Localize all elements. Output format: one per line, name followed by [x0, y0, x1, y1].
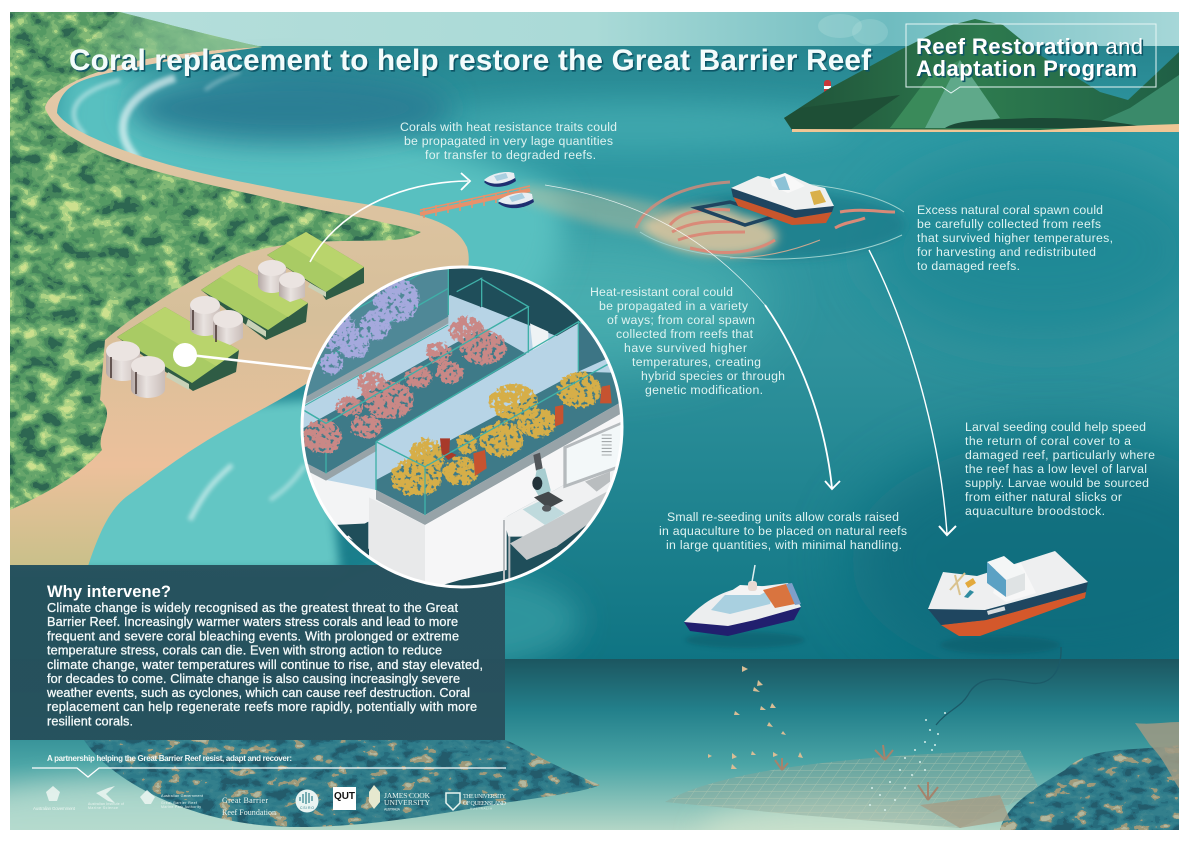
storage tanks [106, 260, 305, 398]
logo: James Cook University: AUSTRALIA [384, 808, 401, 812]
arrow: slick to re-seeding [545, 185, 840, 489]
why intervene panel: climate change, water temperatures will continue to rise, and stay elevated, [47, 658, 483, 672]
larval release hose and seed [869, 647, 1061, 811]
text: larval seeding [965, 420, 1155, 518]
logo: Australian Institute of Marine Science: Australian Institute of [88, 802, 124, 806]
re-seeding boat [684, 565, 805, 648]
why intervene panel [10, 565, 505, 740]
text: excess spawn: be carefully collected from reefs [917, 217, 1101, 231]
text: excess spawn: to damaged reefs. [917, 259, 1020, 273]
why intervene panel: weather events, such as cyclones, which can cause reef destruction. Coral [46, 686, 470, 700]
logo: Australian Government [33, 786, 76, 811]
text: propagation methods: collected from reefs that [616, 327, 754, 341]
text: excess spawn [917, 203, 1113, 273]
logo: James Cook University [369, 785, 431, 812]
connector from building to zoom circle [173, 343, 312, 369]
logo: James Cook University: JAMES COOK [384, 791, 431, 800]
text: re-seeding units: Small re-seeding units allow corals raised [667, 510, 899, 524]
arrow: facility to jetty [310, 173, 470, 262]
partner logos [33, 785, 507, 817]
logo: Great Barrier Reef Foundation [222, 796, 276, 817]
text: larval seeding: supply. Larvae would be sourced [965, 476, 1149, 490]
text: larval seeding: damaged reef, particularly where [965, 448, 1155, 462]
sky band [120, 12, 1179, 46]
tank row 1: purple corals [300, 267, 480, 420]
coral spawn slick [636, 182, 905, 259]
collection vessel [731, 173, 834, 225]
text: larval seeding: aquaculture broodstock. [965, 504, 1105, 518]
partnership line: A partnership helping the Great Barrier Reef resist, adapt and recover: [47, 754, 292, 763]
land: sandy beach [10, 12, 469, 566]
aquaculture facility [106, 232, 364, 398]
text: propagation methods: genetic modification. [645, 383, 763, 397]
why intervene panel: temperature stress, corals can die. Even with strong action to reduce [47, 644, 442, 658]
text: propagation methods: of ways; from coral spawn [607, 313, 755, 327]
text: larval seeding: the reef has a low level of larval [965, 462, 1147, 476]
text: re-seeding units: in aquaculture to be placed on natural reefs [659, 524, 907, 538]
logo: University of Queensland: THE UNIVERSITY [463, 794, 507, 800]
microscope [523, 453, 565, 525]
logo: Great Barrier Reef Marine Park Authority [140, 790, 204, 809]
reef seabed grid [665, 750, 1040, 828]
pink coral colonies [303, 316, 507, 454]
text: heat resistance traits: for transfer to degraded reefs. [425, 148, 596, 162]
program logo box [906, 24, 1156, 93]
building 3 [117, 307, 239, 391]
text: heat resistance traits [400, 120, 617, 162]
text: larval seeding: from either natural slicks or [965, 490, 1122, 504]
text: excess spawn: for harvesting and redistributed [917, 245, 1096, 259]
logo: Great Barrier Reef Foundation: Great Barrier [222, 796, 268, 805]
logo: Australian Institute of Marine Science [88, 786, 124, 810]
right reef [920, 722, 1180, 830]
text: propagation methods: have survived higher [624, 341, 747, 355]
logo: Great Barrier Reef Marine Park Authority: Great Barrier Reef [161, 801, 197, 805]
zoom circle: coral aquaculture lab [300, 260, 633, 590]
partnership line [32, 754, 506, 777]
text: propagation methods: be propagated in a variety [599, 299, 749, 313]
logo: Great Barrier Reef Foundation: Reef Foundation [222, 808, 276, 817]
text: excess spawn: that survived higher temperatures, [917, 231, 1113, 245]
small boat at jetty 1 [484, 172, 516, 187]
logo: Great Barrier Reef Marine Park Authority: Marine Park Authority [161, 805, 201, 809]
logo: CSIRO [296, 790, 318, 812]
lab desk [503, 417, 633, 580]
logo: James Cook University: UNIVERSITY [384, 798, 431, 807]
text: re-seeding units [659, 510, 907, 552]
logo: Australian Government: Australian Government [33, 806, 76, 811]
text: larval seeding: the return of coral cover to a [965, 434, 1131, 448]
purple coral colonies [320, 278, 419, 374]
logo: CSIRO: CSIRO [300, 806, 314, 810]
small seabed corals [775, 745, 938, 800]
why intervene panel: frequent and severe coral bleaching events. With prolonged or extreme [47, 630, 459, 644]
zoom circle outline [302, 267, 622, 587]
text: propagation methods: temperatures, creating [632, 355, 761, 369]
program logo box: Reef Restoration and [916, 34, 1143, 59]
why intervene panel: Barrier Reef. Increasingly warmer waters stress corals and lead to more [47, 615, 458, 629]
building 1 [267, 232, 364, 300]
logo: QUT [333, 787, 356, 810]
text: propagation methods [590, 285, 785, 397]
land: pale headland strip [72, 12, 262, 80]
land: island foliage [10, 12, 421, 510]
logo: Australian Institute of Marine Science: Marine Science [88, 806, 118, 810]
text: heat resistance traits: be propagated in very lage quantities [404, 134, 613, 148]
title: Coral replacement to help restore the Great Barrier Reef [69, 44, 871, 77]
program logo box: Adaptation Program [916, 56, 1137, 81]
text: re-seeding units: in large quantities, with minimal handling. [666, 538, 902, 552]
logo: University of Queensland: AUSTRALIA [470, 806, 492, 810]
why intervene panel: replacement can help regenerate reefs more rapidly, potentially with more [47, 700, 477, 714]
seed larvae [708, 666, 803, 769]
tank row 3: yellow corals [376, 300, 633, 525]
lab bench front [369, 497, 425, 590]
why intervene panel: Climate change is widely recognised as the greatest threat to the Great [47, 601, 458, 615]
logo: University of Queensland [446, 793, 507, 810]
text: propagation methods: hybrid species or through [641, 369, 785, 383]
building 2 [201, 265, 308, 340]
sea surface [10, 46, 1190, 680]
small boat at jetty 2 [498, 193, 534, 208]
why intervene panel: for decades to come. Climate change is also causing increasingly severe [47, 672, 460, 686]
jetty [420, 186, 530, 218]
text: larval seeding: Larval seeding could help speed [965, 420, 1146, 434]
why intervene panel: resilient corals. [47, 714, 133, 728]
text: excess spawn: Excess natural coral spawn could [917, 203, 1103, 217]
logo: Great Barrier Reef Marine Park Authority: Australian Government [161, 794, 204, 798]
white bench floors [300, 303, 633, 580]
underwater scene [0, 659, 1179, 842]
lighthouse buoy [824, 80, 831, 95]
tank row 2: pink corals [300, 278, 567, 490]
larval seeding vessel [928, 551, 1088, 654]
monitor [563, 417, 633, 488]
bay foam [74, 72, 305, 520]
why intervene panel: Why intervene? [47, 583, 171, 601]
island hill [784, 19, 1179, 132]
logo: QUT: QUT [334, 791, 355, 802]
left reef [84, 740, 600, 827]
logo: University of Queensland: OF QUEENSLAND [463, 801, 507, 807]
arrow: slick to larval vessel [869, 250, 956, 535]
text: propagation methods: Heat-resistant coral could [590, 285, 733, 299]
red coral colonies [440, 385, 612, 476]
yellow coral colonies [391, 372, 601, 496]
text: heat resistance traits: Corals with heat resistance traits could [400, 120, 617, 134]
